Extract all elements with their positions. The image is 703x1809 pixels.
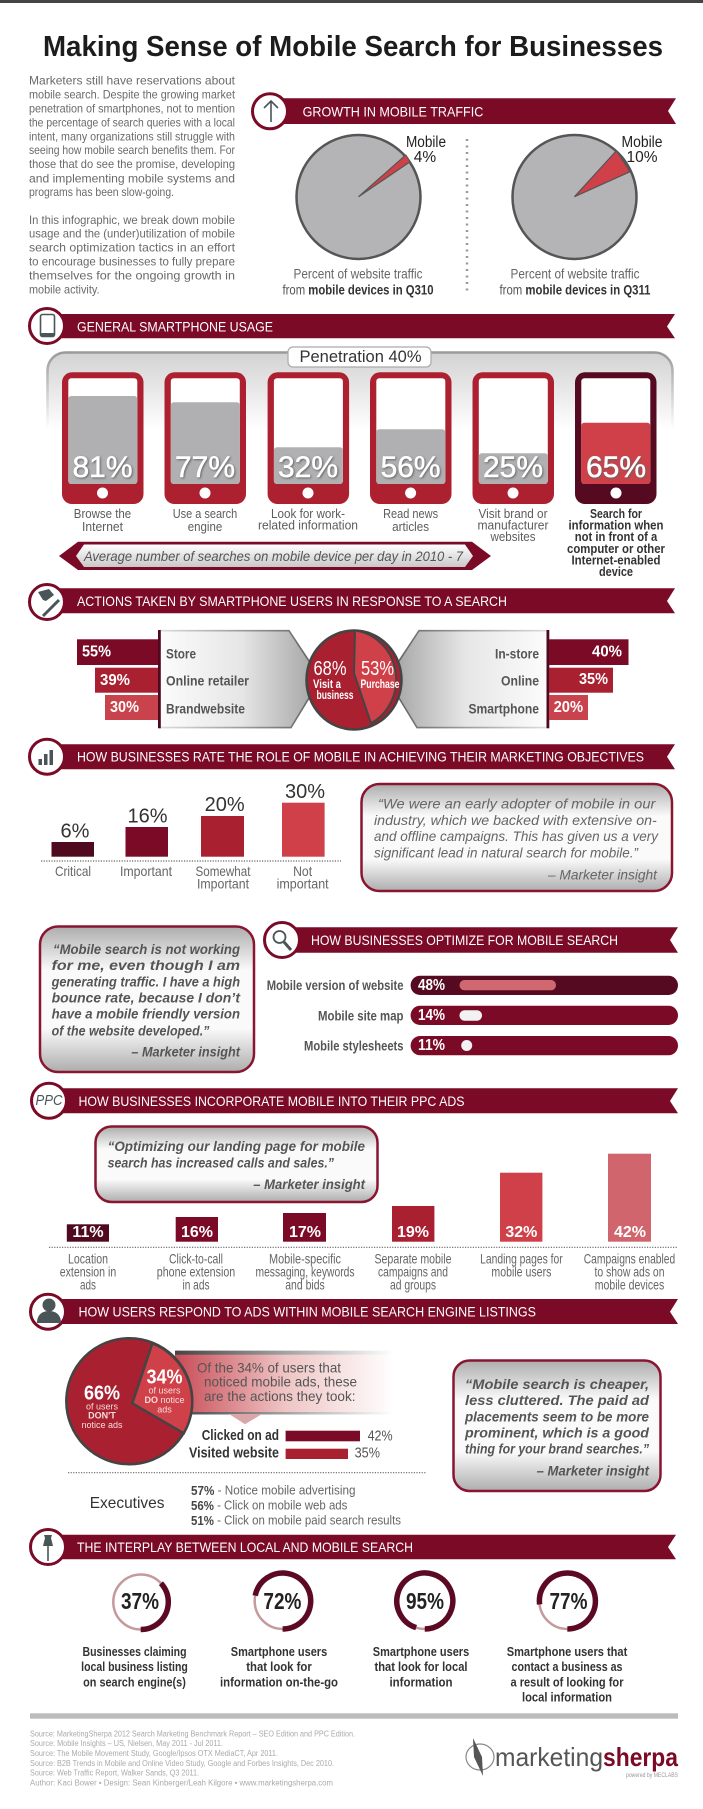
phone: read news articles 56%: Read news bbox=[383, 506, 439, 521]
bar: location extension 11% bbox=[60, 1224, 116, 1292]
phone: search when not at a computer 65%: Internet-enabled bbox=[572, 552, 661, 568]
pie: users noticing ads: ads bbox=[157, 1404, 172, 1414]
bar: location extension 11%: 11% bbox=[72, 1224, 104, 1241]
bar: separate campaigns 19% bbox=[374, 1206, 452, 1292]
sources: Source: B2B Trends in Mobile and Online Video Study, Google and Forbes Insights, Dec 2010. bbox=[30, 1759, 334, 1768]
phone: work-related information 32%: 32% bbox=[278, 451, 338, 484]
callout: average searches per day: Average number of searches on mobile device per day in 2010 - 7 bbox=[83, 548, 464, 564]
phone: search when not at a computer 65%: Search for bbox=[590, 506, 642, 521]
pie: users noticing ads: notice ads bbox=[81, 1420, 123, 1430]
sources bbox=[30, 1730, 355, 1788]
quote: not working for me: of the website developed.” bbox=[52, 1022, 209, 1038]
phone: read news articles 56%: articles bbox=[392, 519, 430, 534]
phone: browse the internet 81%: Internet bbox=[82, 519, 123, 534]
executives stats: 57% - Notice mobile advertising bbox=[191, 1482, 356, 1498]
pie chart: Q310: from mobile devices in Q310 bbox=[282, 281, 434, 297]
banner: how users respond bbox=[30, 1294, 678, 1329]
bar: visited website 35%: Visited website bbox=[189, 1446, 279, 1462]
quote: cheaper less cluttered: thing for your brand searches.” bbox=[465, 1441, 649, 1457]
top bar bbox=[0, 0, 703, 3]
bar: somewhat important 20% bbox=[196, 794, 251, 891]
intro text: usage and the (under)utilization of mobile bbox=[29, 227, 235, 241]
panel: purchase funnel bbox=[399, 630, 628, 728]
phone: read news articles 56%: 56% bbox=[381, 451, 441, 484]
panel: penetration background bbox=[48, 352, 672, 492]
bar: in-store 40% bbox=[549, 639, 628, 665]
bar: mobile stylesheets 11%: Mobile stylesheets bbox=[304, 1038, 404, 1054]
bar chart: PPC tactics bbox=[49, 1154, 678, 1292]
phone: read news articles 56% bbox=[370, 372, 452, 534]
donut: 72% on-the-go: Smartphone users bbox=[231, 1644, 327, 1659]
panel: purchase funnel: Smartphone bbox=[468, 700, 539, 716]
sources: Source: Web Traffic Report, Walker Sands, Q3 2011. bbox=[30, 1768, 199, 1778]
banner: actions taken bbox=[30, 584, 675, 620]
bar: mobile version of website 48%: 48% bbox=[418, 977, 445, 994]
bar: click-to-call 16%: in ads bbox=[182, 1276, 210, 1292]
pie chart: Q311: from mobile devices in Q311 bbox=[500, 281, 651, 297]
logo: marketingsherpa: marketing bbox=[495, 1742, 603, 1772]
phone: use a search engine 77%: 77% bbox=[175, 451, 235, 484]
intro text: seeing how mobile search benefits them. For bbox=[29, 143, 235, 157]
quote: early adopter: industry, which we backed with extensive on- bbox=[374, 812, 657, 828]
intro text: themselves for the ongoing growth in bbox=[29, 268, 235, 282]
pie chart: Q311: 10% bbox=[626, 149, 658, 166]
bar: campaigns enabled 42%: mobile devices bbox=[595, 1276, 664, 1292]
bar: mobile-specific messaging 17%: Mobile-specific bbox=[269, 1250, 341, 1266]
bar: not important 30% bbox=[277, 781, 329, 891]
bar: mobile-specific messaging 17%: 17% bbox=[289, 1224, 321, 1241]
bar: location extension 11%: Location bbox=[68, 1250, 108, 1266]
donut: 95% local information: Smartphone users bbox=[373, 1644, 469, 1659]
intro text: intent, many organizations still struggle with bbox=[29, 129, 235, 143]
bar: mobile-specific messaging 17%: and bids bbox=[285, 1276, 325, 1292]
intro text: programs has been slow-going. bbox=[29, 185, 174, 199]
donut: 95% local information: 95% bbox=[406, 1588, 444, 1614]
bar: mobile stylesheets 11%: 11% bbox=[418, 1037, 445, 1054]
phone: browse the internet 81%: 81% bbox=[72, 451, 133, 484]
bar: critical 6% bbox=[52, 821, 94, 879]
bar: not important 30%: important bbox=[277, 875, 329, 891]
intro text: Marketers still have reservations about bbox=[29, 73, 236, 87]
bar: store 55% bbox=[77, 639, 158, 665]
pie: visit a business and purchase: Visit a bbox=[313, 677, 341, 691]
pie chart: Q310 bbox=[282, 134, 446, 297]
pie: visit a business and purchase bbox=[306, 630, 402, 730]
pie: users noticing ads bbox=[66, 1338, 192, 1464]
bar: visited website 35%: 35% bbox=[355, 1446, 380, 1462]
quote: early adopter bbox=[362, 784, 672, 891]
quote: cheaper less cluttered: prominent, which is a good bbox=[464, 1425, 649, 1441]
quote: cheaper less cluttered: – Marketer insight bbox=[537, 1462, 650, 1478]
panel: purchase funnel: Online bbox=[501, 673, 539, 689]
phone: visit brand websites 25%: websites bbox=[490, 529, 536, 544]
bar: mobile version of website 48%: Mobile version of website bbox=[267, 977, 404, 993]
pie: visit a business and purchase: business bbox=[316, 688, 354, 702]
bar: landing pages 32%: Landing pages for bbox=[480, 1250, 563, 1266]
quote: not working for me: for me, even though I am bbox=[52, 957, 240, 973]
bar: clicked on ad 42%: 42% bbox=[368, 1429, 393, 1445]
logo: marketingsherpa: powered by MECLABS bbox=[626, 1773, 678, 1779]
pie: visit a business and purchase: 68% bbox=[314, 658, 347, 680]
phone: search when not at a computer 65% bbox=[567, 372, 665, 579]
donut: 72% on-the-go: information on-the-go bbox=[220, 1674, 338, 1690]
donut: 77% contact a business: contact a business as bbox=[512, 1659, 622, 1674]
bar: campaigns enabled 42% bbox=[584, 1154, 675, 1292]
pie: users noticing ads: DO notice bbox=[144, 1395, 185, 1405]
pie: users noticing ads: 66% bbox=[84, 1382, 120, 1404]
donut: 95% local information: that look for local bbox=[374, 1659, 468, 1674]
intro text: penetration of smartphones, not to mention bbox=[29, 101, 235, 115]
sources: Author: Kaci Bower • Design: Sean Kinberger/Leah Kilgore • www.marketingsherpa.com bbox=[30, 1778, 333, 1788]
pie: visit a business and purchase: Purchase bbox=[360, 677, 400, 691]
executives stats bbox=[90, 1482, 401, 1528]
quote: early adopter: and offline campaigns. This has given us a very bbox=[374, 828, 659, 844]
intro text: search optimization tactics in an effort bbox=[29, 241, 236, 255]
bar: online 35% bbox=[549, 668, 613, 693]
phone: use a search engine 77%: Use a search bbox=[173, 506, 237, 521]
donut: 77% contact a business: Smartphone users that bbox=[507, 1644, 628, 1659]
quote: not working for me: – Marketer insight bbox=[131, 1044, 241, 1060]
executives stats: 56% - Click on mobile web ads bbox=[191, 1498, 348, 1512]
bar: brand website 30% bbox=[105, 695, 158, 720]
phone: visit brand websites 25%: 25% bbox=[483, 451, 543, 484]
banner: how businesses rate bbox=[30, 739, 675, 774]
intro text: to encourage businesses to fully prepare bbox=[29, 255, 235, 269]
donut: 95% local information: information bbox=[390, 1674, 453, 1690]
phone: search when not at a computer 65%: 65% bbox=[586, 451, 646, 484]
bar: smartphone 20%: 20% bbox=[554, 699, 583, 716]
phone: browse the internet 81% bbox=[62, 372, 144, 534]
quote: not working for me: have a mobile friendly version bbox=[52, 1006, 240, 1022]
quote: not working for me: “Mobile search is not working bbox=[53, 941, 240, 957]
pie chart: Q311 bbox=[500, 134, 662, 297]
panel: visit a business funnel: Store bbox=[166, 645, 196, 661]
callout: of the 34% of users: Of the 34% of users that bbox=[197, 1359, 341, 1375]
callout: of the 34% of users: are the actions they took: bbox=[204, 1388, 356, 1404]
banner: PPC ads bbox=[32, 1083, 678, 1118]
quote: landing page bbox=[96, 1126, 378, 1202]
quote: not working for me: bounce rate, because I don’t bbox=[52, 990, 241, 1006]
pie chart: Q310: Percent of website traffic bbox=[294, 265, 422, 281]
phone: browse the internet 81%: Browse the bbox=[74, 506, 131, 521]
bar: important 16%: Important bbox=[120, 863, 172, 879]
bar: separate campaigns 19%: ad groups bbox=[390, 1276, 436, 1292]
phone: search when not at a computer 65%: device bbox=[599, 564, 633, 579]
phone: search when not at a computer 65%: information when bbox=[568, 518, 664, 532]
bar: somewhat important 20%: Somewhat bbox=[196, 863, 251, 879]
bar: smartphone 20% bbox=[549, 695, 588, 720]
bar: landing pages 32%: 32% bbox=[505, 1224, 537, 1241]
bar: critical 6%: Critical bbox=[55, 863, 91, 879]
bar: location extension 11%: extension in bbox=[60, 1263, 116, 1279]
donut: 37% businesses claiming listing: on search engine(s) bbox=[83, 1674, 186, 1690]
bar chart: role of mobile bbox=[41, 781, 341, 891]
bar: mobile site map 14% bbox=[318, 1006, 678, 1025]
intro text bbox=[29, 73, 236, 296]
quote: cheaper less cluttered: less cluttered. The paid ad bbox=[465, 1392, 649, 1408]
pie chart: Q310: Mobile bbox=[406, 134, 446, 151]
phone: search when not at a computer 65%: not in front of a bbox=[575, 529, 658, 544]
phone: use a search engine 77% bbox=[164, 372, 246, 534]
bar: landing pages 32%: mobile users bbox=[491, 1263, 551, 1279]
pie chart: Q310: 4% bbox=[414, 149, 436, 166]
bar: important 16%: 16% bbox=[127, 805, 168, 827]
bar: click-to-call 16%: Click-to-call bbox=[169, 1250, 223, 1266]
pie chart: Q311: Percent of website traffic bbox=[510, 265, 640, 281]
bar: in-store 40%: 40% bbox=[592, 644, 622, 660]
phone: work-related information 32%: Look for work- bbox=[271, 506, 345, 521]
bar: click-to-call 16% bbox=[157, 1217, 235, 1292]
donut: 37% businesses claiming listing: Businesses claiming bbox=[82, 1644, 187, 1659]
bar: clicked on ad 42%: Clicked on ad bbox=[202, 1428, 279, 1444]
banner: interplay local and mobile bbox=[30, 1530, 676, 1564]
bar: mobile-specific messaging 17%: messaging, keywords bbox=[256, 1263, 354, 1279]
banner: PPC ads: PPC bbox=[36, 1092, 63, 1109]
donut: 77% contact a business: local information bbox=[522, 1690, 612, 1704]
pie: users noticing ads: of users bbox=[148, 1386, 181, 1396]
donut: 95% local information bbox=[373, 1566, 469, 1690]
banner: growth in mobile traffic: GROWTH IN MOBILE TRAFFIC bbox=[303, 103, 483, 119]
quote: landing page: “Optimizing our landing page for mobile bbox=[108, 1138, 365, 1154]
bar: mobile-specific messaging 17% bbox=[256, 1213, 354, 1292]
intro text: those that do see the promise, developing bbox=[29, 157, 235, 171]
banner: general smartphone usage: GENERAL SMARTPHONE USAGE bbox=[77, 319, 273, 335]
banner: PPC ads: HOW BUSINESSES INCORPORATE MOBILE INTO THEIR PPC ADS bbox=[78, 1093, 464, 1109]
intro text: the percentage of search queries with a local bbox=[29, 115, 235, 129]
phone: work-related information 32%: related information bbox=[258, 518, 358, 532]
callout: of the 34% of users: noticed mobile ads, these bbox=[204, 1374, 357, 1390]
pie chart: Q311: Mobile bbox=[622, 134, 662, 151]
donut: 37% businesses claiming listing: local business listing bbox=[81, 1659, 188, 1674]
bar: mobile site map 14%: Mobile site map bbox=[318, 1007, 404, 1023]
pie: users noticing ads: 34% bbox=[146, 1366, 183, 1388]
banner: how businesses rate: HOW BUSINESSES RATE THE ROLE OF MOBILE IN ACHIEVING THEIR MARKETING OBJECTIVES bbox=[77, 749, 644, 765]
bar: mobile stylesheets 11% bbox=[304, 1036, 678, 1055]
phone: visit brand websites 25%: Visit brand or bbox=[478, 506, 548, 521]
panel: visit a business funnel: Online retailer bbox=[166, 673, 249, 689]
banner: interplay local and mobile: THE INTERPLAY BETWEEN LOCAL AND MOBILE SEARCH bbox=[77, 1539, 413, 1555]
bar: store 55%: 55% bbox=[82, 644, 111, 660]
panel: visit a business funnel bbox=[77, 630, 309, 728]
quote: cheaper less cluttered bbox=[454, 1360, 660, 1491]
bar: brand website 30%: 30% bbox=[110, 699, 139, 716]
bar: landing pages 32% bbox=[480, 1173, 563, 1279]
quote: early adopter: significant lead in natural search for mobile.” bbox=[374, 845, 639, 861]
quote: landing page: search has increased calls and sales.” bbox=[108, 1155, 334, 1171]
sources: Source: Mobile Insights – US, Nielsen, May 2011 - Jul 2011. bbox=[30, 1739, 223, 1748]
logo: marketingsherpa: sherpa bbox=[603, 1742, 678, 1772]
intro text: mobile activity. bbox=[29, 282, 100, 296]
bar: separate campaigns 19%: 19% bbox=[397, 1224, 429, 1241]
bar: campaigns enabled 42%: 42% bbox=[614, 1224, 646, 1241]
bar: click-to-call 16%: 16% bbox=[181, 1224, 213, 1241]
quote: early adopter: “We were an early adopter of mobile in our bbox=[378, 795, 657, 811]
quote: not working for me bbox=[40, 926, 254, 1072]
donut: 77% contact a business bbox=[507, 1570, 628, 1704]
bar: visited website 35% bbox=[189, 1446, 380, 1462]
executives stats: Executives bbox=[90, 1495, 164, 1512]
phone: visit brand websites 25% bbox=[472, 372, 554, 544]
intro text: In this infographic, we break down mobile bbox=[29, 213, 235, 227]
pie: users noticing ads: of users bbox=[86, 1401, 119, 1411]
donut: 37% businesses claiming listing: 37% bbox=[121, 1588, 159, 1614]
intro text: and implementing mobile systems and bbox=[29, 171, 235, 185]
banner: how businesses optimize bbox=[264, 922, 678, 958]
bar: separate campaigns 19%: campaigns and bbox=[378, 1263, 448, 1279]
bar: location extension 11%: ads bbox=[80, 1276, 96, 1292]
logo: marketingsherpa bbox=[466, 1738, 678, 1779]
bar: online 35%: 35% bbox=[579, 671, 608, 688]
bar: click-to-call 16%: phone extension bbox=[157, 1263, 235, 1279]
bar: separate campaigns 19%: Separate mobile bbox=[374, 1250, 452, 1266]
phone: use a search engine 77%: engine bbox=[188, 519, 222, 534]
phone: search when not at a computer 65%: computer or other bbox=[567, 541, 665, 556]
sources: Source: The Mobile Movement Study, Google/Ipsos OTX MediaCT, Apr 2011. bbox=[30, 1749, 278, 1758]
donut: 72% on-the-go: 72% bbox=[263, 1588, 301, 1614]
donut: 72% on-the-go: that look for bbox=[246, 1659, 312, 1674]
bar: mobile version of website 48% bbox=[267, 976, 678, 995]
banner: general smartphone usage bbox=[30, 308, 675, 344]
penetration label: Penetration 40% bbox=[300, 347, 422, 366]
sources: Source: MarketingSherpa 2012 Search Marketing Benchmark Report – SEO Edition and PPC Edition. bbox=[30, 1730, 355, 1738]
donut: 37% businesses claiming listing bbox=[81, 1563, 188, 1690]
bar: not important 30%: 30% bbox=[285, 781, 325, 803]
intro text: mobile search. Despite the growing market bbox=[29, 88, 236, 102]
title: Making Sense of Mobile Search for Businesses bbox=[43, 31, 663, 63]
bar: not important 30%: Not bbox=[293, 863, 312, 879]
quote: not working for me: generating traffic. I have a high bbox=[51, 974, 240, 990]
banner: how users respond: HOW USERS RESPOND TO ADS WITHIN MOBILE SEARCH ENGINE LISTINGS bbox=[78, 1304, 536, 1320]
bar: somewhat important 20%: Important bbox=[197, 875, 249, 891]
bar: important 16% bbox=[120, 805, 172, 879]
bar: mobile site map 14%: 14% bbox=[418, 1007, 445, 1024]
bar: critical 6%: 6% bbox=[61, 821, 90, 843]
panel: purchase funnel: In-store bbox=[495, 645, 539, 661]
donut: 77% contact a business: a result of looking for bbox=[510, 1674, 624, 1690]
bar: clicked on ad 42% bbox=[202, 1428, 393, 1445]
banner: growth in mobile traffic bbox=[252, 94, 676, 129]
quote: early adopter: – Marketer insight bbox=[547, 866, 658, 882]
bar: online retailer 39%: 39% bbox=[100, 672, 130, 689]
quote: cheaper less cluttered: “Mobile search is cheaper, bbox=[465, 1376, 649, 1392]
executives stats: 51% - Click on mobile paid search results bbox=[191, 1512, 401, 1528]
bar: campaigns enabled 42%: to show ads on bbox=[594, 1263, 664, 1279]
quote: cheaper less cluttered: placements seem to be more bbox=[464, 1409, 649, 1425]
quote: landing page: – Marketer insight bbox=[253, 1176, 366, 1192]
callout: average searches per day bbox=[59, 542, 491, 570]
panel: visit a business funnel: Brandwebsite bbox=[166, 700, 245, 716]
banner: how businesses optimize: HOW BUSINESSES OPTIMIZE FOR MOBILE SEARCH bbox=[311, 932, 618, 948]
pie: users noticing ads: DON'T bbox=[88, 1410, 116, 1420]
phone: visit brand websites 25%: manufacturer bbox=[478, 518, 549, 532]
pie: visit a business and purchase: 53% bbox=[361, 658, 394, 680]
bar: online retailer 39% bbox=[95, 668, 158, 693]
bar: somewhat important 20%: 20% bbox=[205, 794, 245, 816]
callout: of the 34% of users bbox=[175, 1351, 394, 1424]
donut: 72% on-the-go bbox=[220, 1568, 338, 1690]
phone: work-related information 32% bbox=[258, 372, 358, 532]
banner: actions taken: ACTIONS TAKEN BY SMARTPHONE USERS IN RESPONSE TO A SEARCH bbox=[77, 593, 507, 609]
donut: 77% contact a business: 77% bbox=[550, 1588, 588, 1614]
